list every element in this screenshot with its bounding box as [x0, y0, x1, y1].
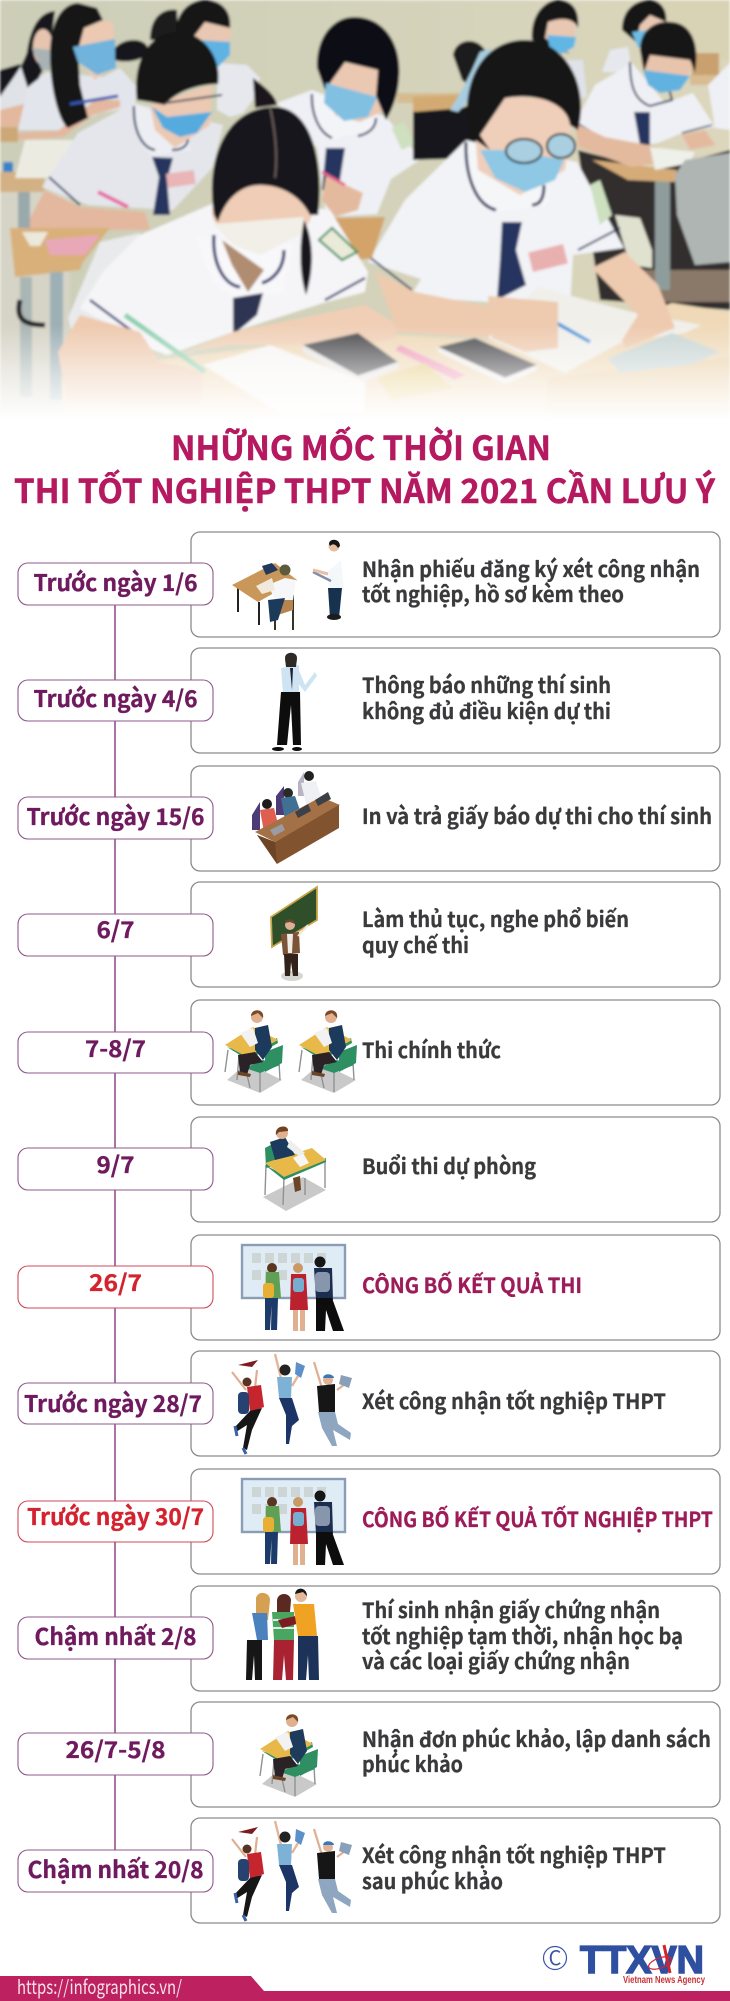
date pill 5: 7-8/7: [85, 1030, 146, 1064]
panel: card 1: [191, 532, 720, 637]
rightmost shirt: [708, 63, 730, 130]
panel: card 10: [191, 1586, 720, 1691]
text: phúc khảo: [362, 1749, 463, 1779]
date pill 4: 6/7: [96, 911, 134, 945]
text: tốt nghiệp tạm thời, nhận học bạ: [362, 1621, 683, 1651]
top right back students: [602, 47, 632, 72]
text: [362, 1724, 711, 1779]
text: Nhận đơn phúc khảo, lập danh sách: [362, 1724, 711, 1754]
icon: teacher standing: [272, 653, 317, 751]
footer band: [0, 1973, 730, 2001]
date pill 1: [18, 563, 213, 605]
panel: card 3: [191, 766, 720, 871]
open book: [488, 287, 702, 373]
front desk: [62, 301, 730, 396]
icon: three students with certificates: [246, 1589, 319, 1680]
dark underside right: [578, 150, 730, 310]
text: In và trả giấy báo dự thi cho thí sinh: [362, 801, 712, 831]
icon: jumping graduates: [232, 1354, 352, 1454]
panel: card 11: [191, 1702, 720, 1807]
text: không đủ điều kiện dự thi: [362, 696, 611, 726]
text: Làm thủ tục, nghe phổ biến: [362, 904, 629, 934]
copyright symbol: C: [549, 1942, 562, 1971]
date pill 1: Trước ngày 1/6: [34, 564, 198, 598]
photo: students sitting the exam in masks: [0, 0, 730, 431]
text: Thí sinh nhận giấy chứng nhận: [362, 1595, 660, 1625]
date pill 11: [18, 1731, 213, 1775]
date pill 9: Trước ngày 30/7: [27, 1498, 204, 1532]
text: và các loại giấy chứng nhận: [362, 1646, 630, 1676]
panel: card 4: [191, 882, 720, 987]
text: [362, 1840, 666, 1896]
logo: TTXVN: TTXVN: [580, 1939, 704, 1982]
panel: card 8: [191, 1351, 720, 1456]
text: [362, 670, 611, 726]
desks back left: [0, 127, 18, 142]
date pill 2: Trước ngày 4/6: [34, 680, 198, 714]
text: CÔNG BỐ KẾT QUẢ THI: [362, 1270, 582, 1300]
date pill 10: Chậm nhất 2/8: [34, 1618, 196, 1652]
text: Nhận phiếu đăng ký xét công nhận: [362, 554, 700, 584]
left desk, jacket and legs: [10, 228, 110, 277]
icon: jumping graduates: [232, 1821, 352, 1921]
grey sweater: [675, 153, 730, 265]
date pill 6: [18, 1146, 213, 1190]
logo: TTXVN: Vietnam News Agency: [623, 1975, 705, 1986]
timeline connector: [114, 590, 116, 1870]
date pill 10: [18, 1617, 213, 1659]
text: quy chế thi: [362, 930, 469, 960]
right student's arms: [376, 272, 492, 338]
text: sau phúc khảo: [362, 1866, 503, 1896]
title: THI TỐT NGHIỆP THPT NĂM 2021 CẦN LƯU Ý: [14, 465, 716, 513]
text: Xét công nhận tốt nghiệp THPT: [362, 1386, 666, 1416]
text: [362, 1595, 683, 1676]
far left student: [0, 65, 42, 114]
student centre left: [42, 103, 223, 210]
front student shirt: [80, 197, 368, 355]
right student: [575, 63, 715, 150]
student centre right: [277, 90, 421, 217]
panel: card 5: [191, 1000, 720, 1105]
text: Xét công nhận tốt nghiệp THPT: [362, 1840, 666, 1870]
panel: card 7: [191, 1235, 720, 1340]
date pill 11: 26/7-5/8: [66, 1731, 166, 1765]
icon: student at desk: [260, 1714, 318, 1797]
panel: card 9: [191, 1469, 720, 1574]
text: Thi chính thức: [362, 1035, 501, 1065]
wood chair and desk back right: [397, 93, 462, 103]
main right student: [368, 141, 624, 307]
photo fade into white: [0, 325, 730, 420]
text: [362, 904, 629, 960]
date pill 8: Trước ngày 28/7: [24, 1385, 202, 1419]
chair between front students: [333, 217, 385, 262]
date pill 4: [18, 911, 213, 956]
back student centre: [150, 10, 178, 40]
title: NHỮNG MỐC THỜI GIAN: [171, 422, 551, 470]
panel: card 2: [191, 648, 720, 753]
text: [362, 554, 700, 609]
panel: card 6: [191, 1117, 720, 1222]
second left student with long hair: [18, 68, 137, 130]
text: Thông báo những thí sinh: [362, 670, 611, 700]
icon: student at desk and teacher: [232, 540, 344, 630]
text: tốt nghiệp, hồ sơ kèm theo: [362, 579, 624, 609]
left arm of front student: [57, 314, 163, 370]
date pill 7: 26/7: [89, 1264, 142, 1298]
date pill 3: Trước ngày 15/6: [26, 798, 204, 832]
icon: students reading graduation result board: [242, 1479, 345, 1565]
icon: teacher and chalkboard: [271, 887, 317, 981]
calculators, paper, cloth: [303, 333, 398, 376]
copyright symbol: [544, 1942, 566, 1971]
date pill 12: Chậm nhất 20/8: [28, 1851, 204, 1885]
text: Buổi thi dự phòng: [362, 1151, 536, 1181]
date pill 6: 9/7: [96, 1146, 134, 1180]
icon: student at reserve exam desk: [263, 1126, 326, 1211]
date pill 5: [18, 1030, 213, 1073]
date pill 7: [18, 1264, 213, 1308]
title: [14, 422, 716, 513]
icon: students reading result board: [242, 1245, 345, 1331]
icon: two students at exam desks: [225, 1010, 357, 1093]
icon: exam board at table: [252, 771, 340, 864]
footer url: https://infographics.vn/: [17, 1973, 182, 2000]
panel: card 12: [191, 1818, 720, 1923]
